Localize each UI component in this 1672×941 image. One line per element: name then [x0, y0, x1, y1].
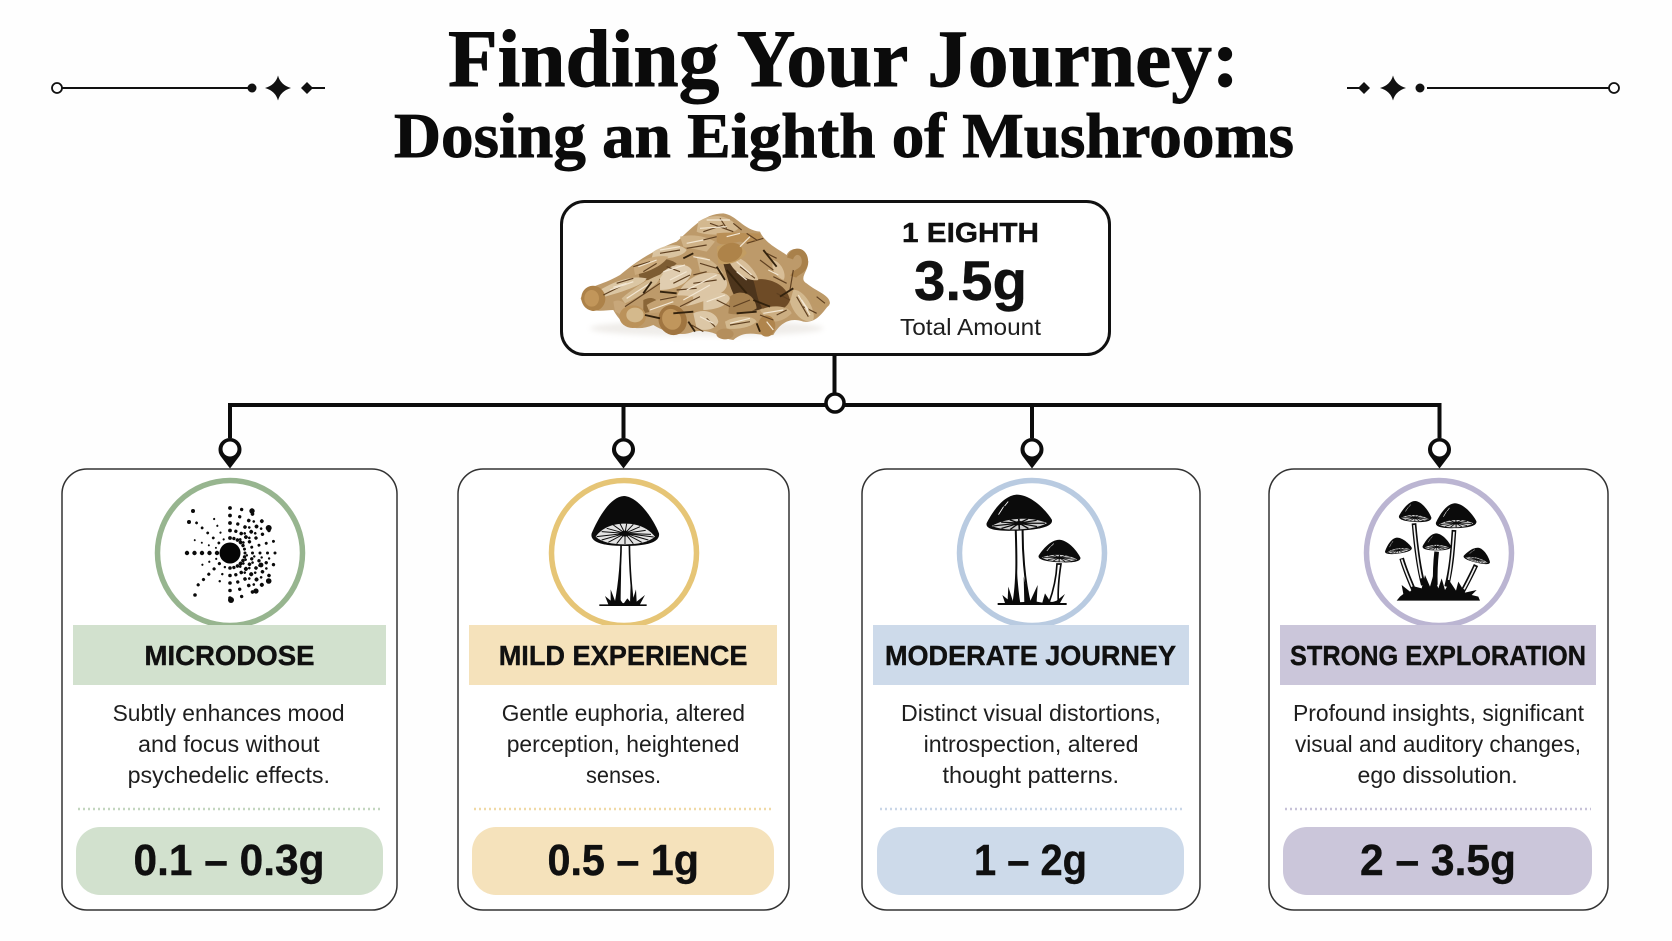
description: mild: Gentle euphoria, altered — [502, 700, 745, 726]
dose pill: strong: 2 – 3.5g — [1360, 836, 1516, 885]
description: strong: ego dissolution. — [1358, 762, 1518, 788]
icon: single mushroom — [591, 496, 659, 606]
title — [394, 13, 1294, 171]
dose pill: moderate: 1 – 2g — [974, 836, 1087, 885]
heading band: mild: MILD EXPERIENCE — [499, 640, 748, 671]
description: moderate: Distinct visual distortions, — [901, 700, 1161, 726]
icon: radial dots — [158, 480, 302, 626]
pin: strong — [1428, 438, 1451, 468]
title: Finding Your Journey: — [448, 13, 1239, 104]
heading band: strong — [1280, 625, 1596, 685]
icon ring: strong — [1366, 480, 1512, 626]
total amount box — [562, 202, 1110, 354]
dose pill: moderate — [877, 827, 1184, 895]
panel: moderate journey — [862, 469, 1200, 910]
left title ornament — [52, 76, 325, 100]
dose pill: microdose: 0.1 – 0.3g — [134, 836, 324, 885]
heading band: mild — [469, 625, 777, 685]
description: moderate — [901, 700, 1161, 788]
panel: strong exploration — [1269, 469, 1608, 910]
description: strong — [1293, 700, 1585, 788]
connector tree — [219, 355, 1451, 468]
dose pill: strong — [1283, 827, 1592, 895]
icon ring: moderate — [960, 480, 1104, 626]
description: microdose: and focus without — [138, 731, 320, 757]
description: strong: Profound insights, significant — [1293, 700, 1585, 726]
description: microdose — [113, 700, 345, 788]
icon ring: mild — [552, 480, 696, 626]
dose pill: microdose — [76, 827, 383, 895]
description: strong: visual and auditory changes, — [1295, 731, 1581, 757]
description: mild: senses. — [586, 762, 661, 788]
icon: mushroom cluster — [1383, 500, 1493, 601]
pin: moderate — [1020, 438, 1044, 468]
value: 3.5g: 3.5g — [914, 249, 1027, 312]
image: dried mushroom pile — [578, 213, 830, 340]
heading band: moderate: MODERATE JOURNEY — [885, 640, 1176, 671]
dose pill: mild: 0.5 – 1g — [548, 836, 699, 885]
description: microdose: psychedelic effects. — [128, 762, 330, 788]
panel: mild experience — [458, 469, 789, 910]
description: mild: perception, heightened — [507, 731, 740, 757]
heading band: microdose — [73, 625, 386, 685]
heading band: strong: STRONG EXPLORATION — [1290, 640, 1586, 671]
pin: microdose — [219, 438, 242, 468]
description: microdose: Subtly enhances mood — [113, 700, 345, 726]
right title ornament — [1347, 76, 1619, 100]
heading band: microdose: MICRODOSE — [144, 640, 314, 671]
description: moderate: introspection, altered — [924, 731, 1138, 757]
label: 1 eighth: 1 EIGHTH — [902, 217, 1039, 248]
label: total amount: Total Amount — [900, 314, 1042, 340]
panel: microdose — [62, 469, 397, 910]
icon: two mushrooms — [985, 493, 1081, 605]
description: moderate: thought patterns. — [942, 762, 1119, 788]
dose pill: mild — [472, 827, 774, 895]
heading band: moderate — [873, 625, 1189, 685]
pin: mild — [612, 438, 635, 468]
description: mild — [502, 700, 745, 788]
title: Dosing an Eighth of Mushrooms — [394, 101, 1294, 171]
